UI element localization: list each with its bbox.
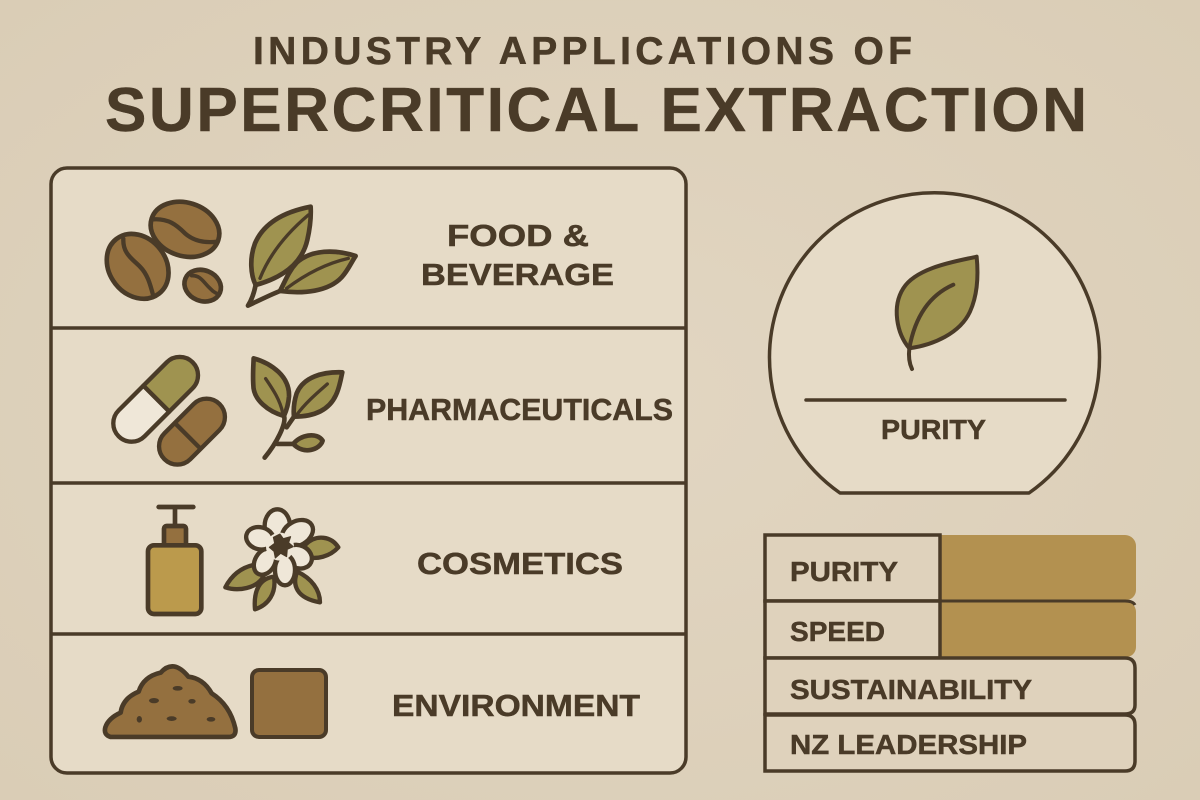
- bar: nz leadership: NZ LEADERSHIP: [790, 729, 1027, 760]
- label: cosmetics: COSMETICS: [417, 546, 623, 581]
- bar: nz leadership: [765, 715, 1135, 771]
- icon: soil pile: [105, 666, 236, 737]
- label: food and beverage: FOOD &: [447, 218, 589, 253]
- panel: purity badge: [770, 193, 1099, 493]
- title: [105, 30, 1087, 145]
- label: purity: PURITY: [881, 414, 986, 445]
- icon: herb sprig: [253, 358, 342, 458]
- panel: industries: [51, 168, 686, 773]
- title: SUPERCRITICAL EXTRACTION: [105, 76, 1087, 145]
- title: INDUSTRY APPLICATIONS OF: [253, 30, 912, 73]
- icon: brown square: [252, 670, 326, 737]
- label: food and beverage: [421, 218, 614, 292]
- label: food and beverage: BEVERAGE: [421, 257, 614, 292]
- bar: speed: SPEED: [790, 616, 885, 647]
- bar: purity: [765, 535, 1136, 601]
- icon: pump bottle: [148, 507, 201, 614]
- icon: leaf: [897, 257, 978, 369]
- bar: sustainability: [765, 658, 1135, 714]
- label: pharmaceuticals: PHARMACEUTICALS: [366, 392, 673, 427]
- icon: flower: [225, 509, 338, 609]
- panel: attribute bars: [765, 535, 1136, 771]
- icon: coffee beans: [94, 193, 227, 311]
- bar: purity: PURITY: [790, 556, 898, 587]
- bar: speed: [765, 601, 1136, 658]
- icon: capsules: [106, 349, 233, 472]
- icon: two leaves: [248, 207, 356, 306]
- bar: sustainability: SUSTAINABILITY: [790, 674, 1032, 705]
- label: environment: ENVIRONMENT: [392, 688, 640, 723]
